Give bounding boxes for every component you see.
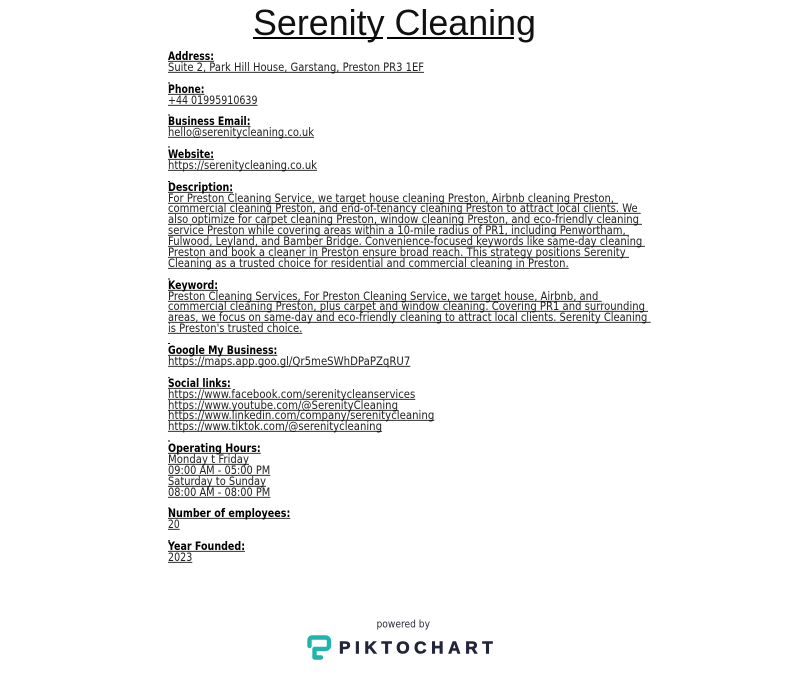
text block: description: also optimize for carpet cleaning Preston, window cleaning Preston, and eco-friendly cleaning — [168, 212, 639, 226]
text block: operating hours: Saturday to Sunday — [168, 474, 266, 488]
icon: piktochart mark — [310, 638, 329, 658]
powered by piktochart logo: powered by — [376, 618, 431, 630]
text block: social links: https://www.youtube.com/@SerenityCleaning — [168, 398, 398, 412]
text block: description: Cleaning as a trusted choice for residential and commercial cleaning in Preston. — [168, 256, 569, 270]
text block: social links: https://www.linkedin.com/company/serenitycleaning — [168, 408, 434, 422]
text block: website: Website: — [168, 147, 214, 161]
text block: description: For Preston Cleaning Service, we target house cleaning Preston, Airbnb cleaning Preston, — [168, 191, 614, 205]
text block: address: Suite 2, Park Hill House, Garstang, Preston PR3 1EF — [168, 60, 424, 74]
text block: keyword: Preston Cleaning Services, For Preston Cleaning Service, we target house, Airbnb, and — [168, 289, 598, 303]
text block: operating hours: Operating Hours: — [168, 441, 261, 455]
text block: operating hours: Monday t Friday — [168, 452, 249, 466]
powered by piktochart logo — [310, 618, 493, 658]
text block: operating hours: 09:00 AM - 05:00 PM — [168, 463, 270, 477]
text block: address — [168, 49, 424, 74]
text block: business email: Business Email: — [168, 114, 250, 128]
text block: number of employees: 20 — [168, 517, 180, 531]
text block: keyword: is Preston's trusted choice. — [168, 321, 302, 335]
text block: website — [168, 147, 317, 172]
text block: keyword: commercial cleaning Preston, plus carpet and window cleaning. Covering PR1 and surrounding — [168, 299, 645, 313]
text block: phone: Phone: — [168, 82, 204, 96]
title: Serenity Cleaning — [253, 2, 536, 43]
text block: google my business: Google My Business: — [168, 343, 277, 357]
text block: description: Fulwood, Leyland, and Bamber Bridge. Convenience-focused keywords like same-day cleaning — [168, 234, 642, 248]
text block: description: service Preston while covering areas within a 10-mile radius of PR1, including Penwortham, — [168, 223, 626, 237]
text block: social links: Social links: — [168, 376, 231, 390]
text block: business email — [168, 114, 314, 139]
text block: business email: hello@serenitycleaning.co.uk — [168, 125, 314, 139]
text block: keyword: Keyword: — [168, 278, 218, 292]
text block: year founded: 2023 — [168, 550, 192, 564]
text block: phone: +44 01995910639 — [168, 93, 258, 107]
text block: description: commercial cleaning Preston, and end-of-tenancy cleaning Preston to attract local clients. We — [168, 201, 638, 215]
text block: keyword — [168, 278, 651, 335]
text block: phone — [168, 82, 258, 107]
text block: keyword: areas, we focus on same-day and eco-friendly cleaning to attract local clients. Serenity Cleaning — [168, 310, 647, 324]
powered by piktochart logo: PIKTOCHART — [339, 638, 493, 658]
text block: address: Address: — [168, 49, 214, 63]
text block: google my business — [168, 343, 410, 368]
text block: operating hours: 08:00 AM - 08:00 PM — [168, 485, 270, 499]
text block: description: Description: — [168, 180, 233, 194]
text block: number of employees: Number of employees: — [168, 506, 290, 520]
text block: operating hours — [168, 441, 270, 499]
text block: website: https://serenitycleaning.co.uk — [168, 158, 317, 172]
text block: social links — [168, 376, 434, 433]
text block: social links: https://www.tiktok.com/@serenitycleaning — [168, 419, 382, 433]
text block: year founded: Year Founded: — [167, 539, 245, 553]
text block: number of employees — [168, 506, 290, 531]
text block: description — [168, 180, 645, 270]
text block: social links: https://www.facebook.com/serenitycleanservices — [168, 387, 415, 401]
text block: year founded — [167, 539, 245, 564]
text block: description: Preston and book a cleaner in Preston ensure broad reach. This strategy positions Serenity — [168, 245, 626, 259]
text block: google my business: https://maps.app.goo.gl/Qr5meSWhDPaPZqRU7 — [168, 354, 410, 368]
